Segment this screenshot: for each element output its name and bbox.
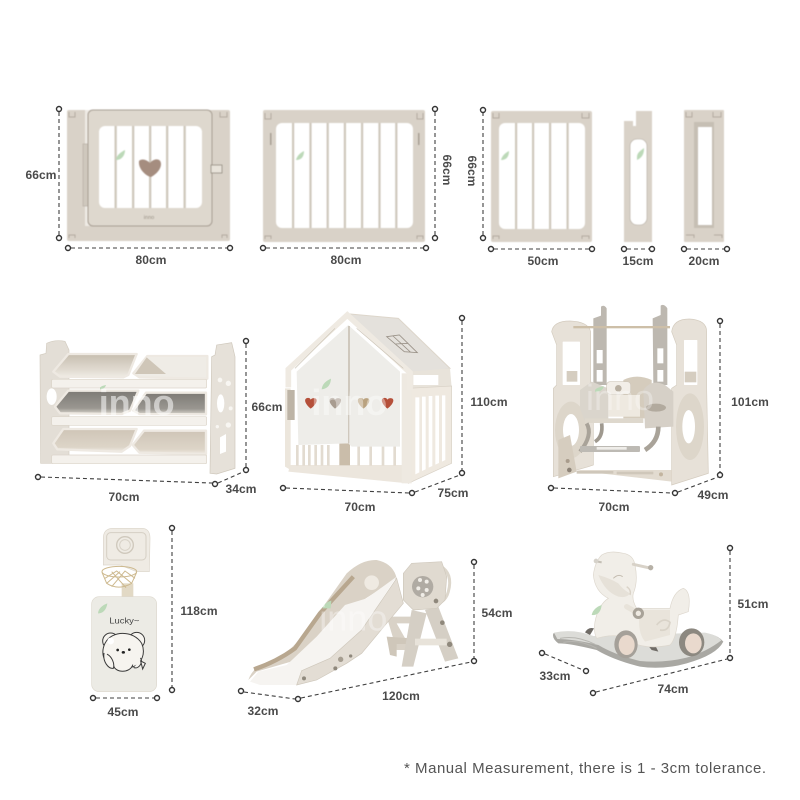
dimension: width [682,246,730,268]
dimension: height: 51cm [737,597,769,611]
panel: 15cm connector [622,111,654,268]
illustration: door gate [67,110,230,241]
illustration: slide: inno [319,598,387,639]
dimension: length [296,662,471,703]
dimension: length: 74cm [657,682,689,696]
illustration: hoop and bear board: Lucky~ [109,615,139,625]
panel: 80cm gate with door [25,106,232,267]
dimension: length: 120cm [382,689,420,703]
dimension: depth: 34cm [225,482,257,496]
dimension: depth [539,650,588,683]
dimension: depth: 32cm [247,704,279,718]
dimension: width [66,246,232,267]
dimension: width [36,474,218,504]
dimension: depth [678,477,729,502]
illustration: swing [552,305,708,485]
panel: slide [238,560,513,718]
dimension: width: 50cm [527,254,559,268]
panel: 20cm connector [682,110,730,268]
dimension: width: 80cm [330,253,362,267]
dimension: width [622,246,654,268]
dimension: width [280,486,414,514]
dimension: width: 80cm [135,253,167,267]
dimension: height: 66cm [440,154,454,186]
dimension: depth [415,475,469,500]
illustration: narrow barred gate [491,111,592,242]
dimension: width: 70cm [598,500,630,514]
dimension: depth [238,688,295,718]
dimension: depth: 75cm [437,486,469,500]
panel: swing set [548,305,769,514]
panel: rocking horse [539,546,769,696]
dimension: width: 45cm [107,705,139,719]
illustration: 15cm connector [624,111,652,242]
dimension: height: 66cm [25,168,57,182]
dimension: height: 101cm [731,395,769,409]
illustration: hoop and bear board [92,528,157,692]
illustration: shelf with six bins: inno [99,382,175,423]
dimension: height [718,318,769,478]
illustration: barred gate [263,110,425,242]
dimension: height [465,108,486,240]
footnote: * Manual Measurement, there is 1 - 3cm tolerance. [404,760,766,777]
panel: basketball hoop [90,526,218,719]
dimension: height [432,106,454,240]
dimension: height: 110cm [470,395,508,409]
illustration: 20cm connector [684,110,724,242]
illustration: swing: inno [586,377,654,418]
dimension: height: 118cm [180,604,218,618]
illustration: rocking horse [553,552,723,668]
illustration: house with curtain: inno [311,382,387,423]
dimension: length [590,659,727,696]
dimension: depth: 33cm [539,669,571,683]
dimension: width: 20cm [688,254,720,268]
dimension: height: 66cm [465,155,479,187]
dimension: width [90,696,160,719]
dimension: width [488,246,594,268]
panel: toy storage shelf [36,338,283,504]
panel: play house [280,314,508,514]
dimension: height [244,338,283,472]
illustration: shelf with six bins [40,341,235,474]
dimension: height: 54cm [481,606,513,620]
dimension: width [260,246,428,267]
dimension: width: 15cm [622,254,654,268]
illustration: door gate: inno [144,215,154,221]
dimension: height [170,526,218,692]
illustration: house with curtain [285,314,452,483]
dimension: width [548,486,678,514]
panel: 50cm gate [465,108,594,268]
dimension: height: 66cm [251,400,283,414]
dimension: depth: 49cm [697,488,729,502]
dimension: height [728,546,769,660]
dimension: height [460,316,508,476]
dimension: depth [218,472,257,496]
illustration: slide [248,560,458,685]
dimension: width: 70cm [344,500,376,514]
panel: 80cm gate [260,106,454,267]
dimension: height [25,106,62,240]
dimension: width: 70cm [108,490,140,504]
dimension: height [472,560,513,664]
